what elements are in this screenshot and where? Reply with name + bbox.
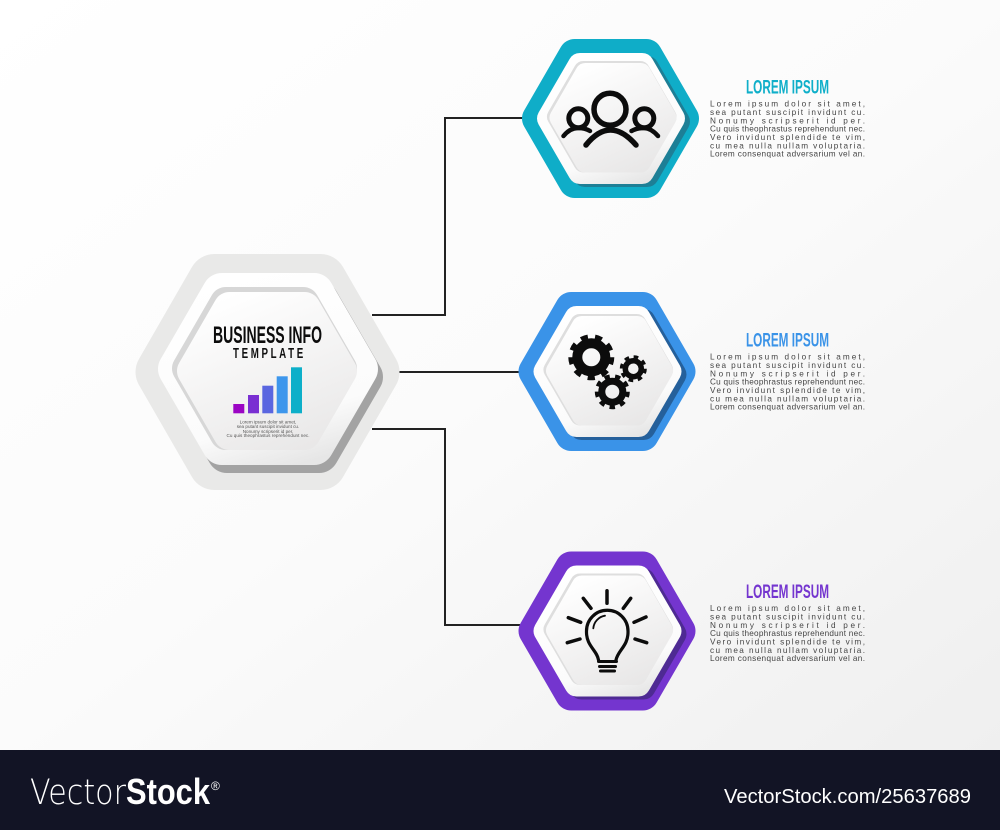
teal face [560,73,666,162]
central white plate [178,293,358,445]
connector: middle branch [399,371,520,373]
icon: people [564,93,658,145]
central face shape [193,308,341,434]
blue ring [554,324,663,416]
central hexagon panel [162,280,374,464]
icon: gears [571,337,645,407]
body text: blue: Cu quis theophrastus reprehendunt nec. [710,378,865,387]
purple face [556,586,663,675]
central body text: Lorem ipsum dolor sit amet, [240,420,296,424]
blue white plate [546,318,670,425]
bar chart [233,367,302,413]
central face [193,308,341,434]
central body text: sea putant suscipit invidunt cu. [237,424,299,429]
footer logo: Stock [126,771,211,812]
central plate shape [178,293,358,445]
body text: purple: Cu quis theophrastus reprehendunt nec. [710,629,865,638]
connector: top branch [372,118,524,315]
purple shadow [550,580,674,688]
panel: blue hexagon [534,308,680,435]
body text: blue: Lorem ipsum dolor sit amet, [710,352,865,362]
body text: purple: Lorem consenquat adversarium vel an. [710,654,865,663]
connector: bottom branch [372,429,520,625]
footer logo: ® [211,779,220,793]
central outer hexagon [162,280,374,464]
body text: teal: sea putant suscipit invidunt cu. [710,108,865,117]
blue shadow [550,321,674,428]
purple outer hexagon [534,568,680,694]
central hexagon shadow [183,301,363,453]
body text: teal: Vero invidunt splendide te vim, [710,133,865,142]
body text: blue: cu mea nulla nullam voluptaria. [710,394,865,403]
body text: purple: Nonumy scripserit id per. [710,621,865,630]
body text: purple [710,604,865,663]
heading: purple: LOREM IPSUM [746,582,829,603]
central body text [226,420,310,438]
blue outer hexagon [534,308,680,435]
central ring [188,303,341,434]
purple white plate [546,578,670,684]
panel: teal hexagon [538,55,683,182]
purple ring [554,584,663,675]
body text: purple: sea putant suscipit invidunt cu. [710,612,865,622]
central title: BUSINESS INFO [213,322,322,349]
body text: purple: cu mea nulla nullam voluptaria. [710,646,865,655]
body text: teal: cu mea nulla nullam voluptaria. [710,141,865,150]
body text: blue: Vero invidunt splendide te vim, [710,386,865,395]
central body text: Cu quis theophrastus reprehendunt nec. [226,433,310,438]
teal outer hexagon [538,55,683,182]
body text: blue: sea putant suscipit invidunt cu. [710,361,865,370]
footer logo: Vector [30,773,127,813]
body text: blue [710,352,865,412]
teal ring [557,71,666,162]
icon: light bulb [567,591,647,671]
heading: blue: LOREM IPSUM [746,330,829,352]
body text: purple: Lorem ipsum dolor sit amet, [710,604,865,613]
teal white plate [549,65,673,172]
footer image id: VectorStock.com/25637689 [724,785,971,808]
body text: teal: Lorem consenquat adversarium vel an. [710,150,865,159]
body text: blue: Lorem consenquat adversarium vel an. [710,403,865,412]
body text: teal: Cu quis theophrastus reprehendunt nec. [710,125,865,134]
footer logo [30,771,220,813]
heading: teal: LOREM IPSUM [746,78,829,98]
body text: teal: Nonumy scripserit id per. [710,116,865,125]
body text: teal: Lorem ipsum dolor sit amet, [710,100,865,108]
central body text: Nonumy scripserit id per. [243,429,293,434]
teal shadow [554,68,678,175]
body text: teal [710,100,865,159]
body text: blue: Nonumy scripserit id per. [710,369,865,378]
body text: purple: Vero invidunt splendide te vim, [710,638,865,646]
blue face [556,326,663,416]
panel: purple hexagon [534,568,680,694]
central subtitle: TEMPLATE [233,345,303,362]
footer bar [0,750,1000,830]
